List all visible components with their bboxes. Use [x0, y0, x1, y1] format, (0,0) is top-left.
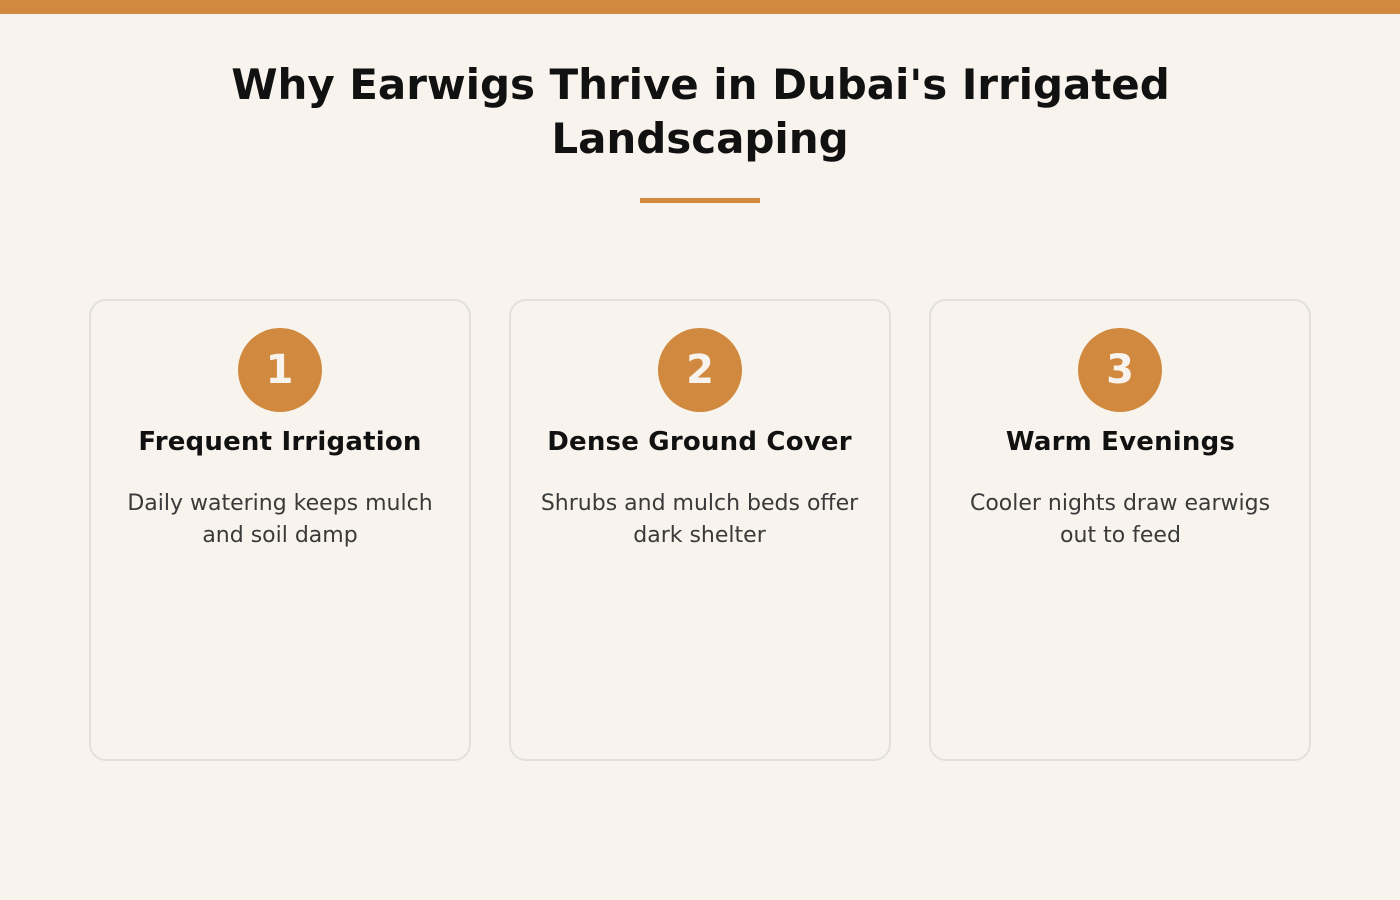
- panel: warm evenings: [930, 300, 1310, 760]
- text: dense ground cover: Shrubs and mulch beds offer: [541, 491, 859, 516]
- panel: dense ground cover: [510, 300, 890, 760]
- text: warm evenings: [970, 491, 1270, 548]
- text: frequent irrigation: [127, 491, 433, 548]
- text: frequent irrigation: Daily watering keeps mulch: [127, 491, 433, 516]
- text: frequent irrigation: and soil damp: [202, 523, 358, 548]
- text: warm evenings: Cooler nights draw earwigs: [970, 491, 1270, 516]
- number badge 3: 3: [1106, 347, 1134, 393]
- title: Landscaping: [551, 114, 849, 163]
- panel: frequent irrigation: [90, 300, 470, 760]
- heading: warm evenings: Warm Evenings: [1006, 427, 1235, 457]
- top accent bar: [0, 0, 1400, 14]
- title: [231, 60, 1170, 163]
- number badge 1: 1: [266, 347, 293, 393]
- title: Why Earwigs Thrive in Dubai's Irrigated: [231, 60, 1170, 109]
- heading: frequent irrigation: Frequent Irrigation: [138, 427, 422, 457]
- title underline: [640, 198, 760, 203]
- text: dense ground cover: [541, 491, 859, 548]
- text: warm evenings: out to feed: [1060, 523, 1181, 548]
- number badge 1: [238, 328, 322, 412]
- number badge 2: [658, 328, 742, 412]
- text: dense ground cover: dark shelter: [633, 523, 767, 548]
- heading: dense ground cover: Dense Ground Cover: [547, 427, 852, 457]
- number badge 2: 2: [686, 347, 714, 393]
- number badge 3: [1078, 328, 1162, 412]
